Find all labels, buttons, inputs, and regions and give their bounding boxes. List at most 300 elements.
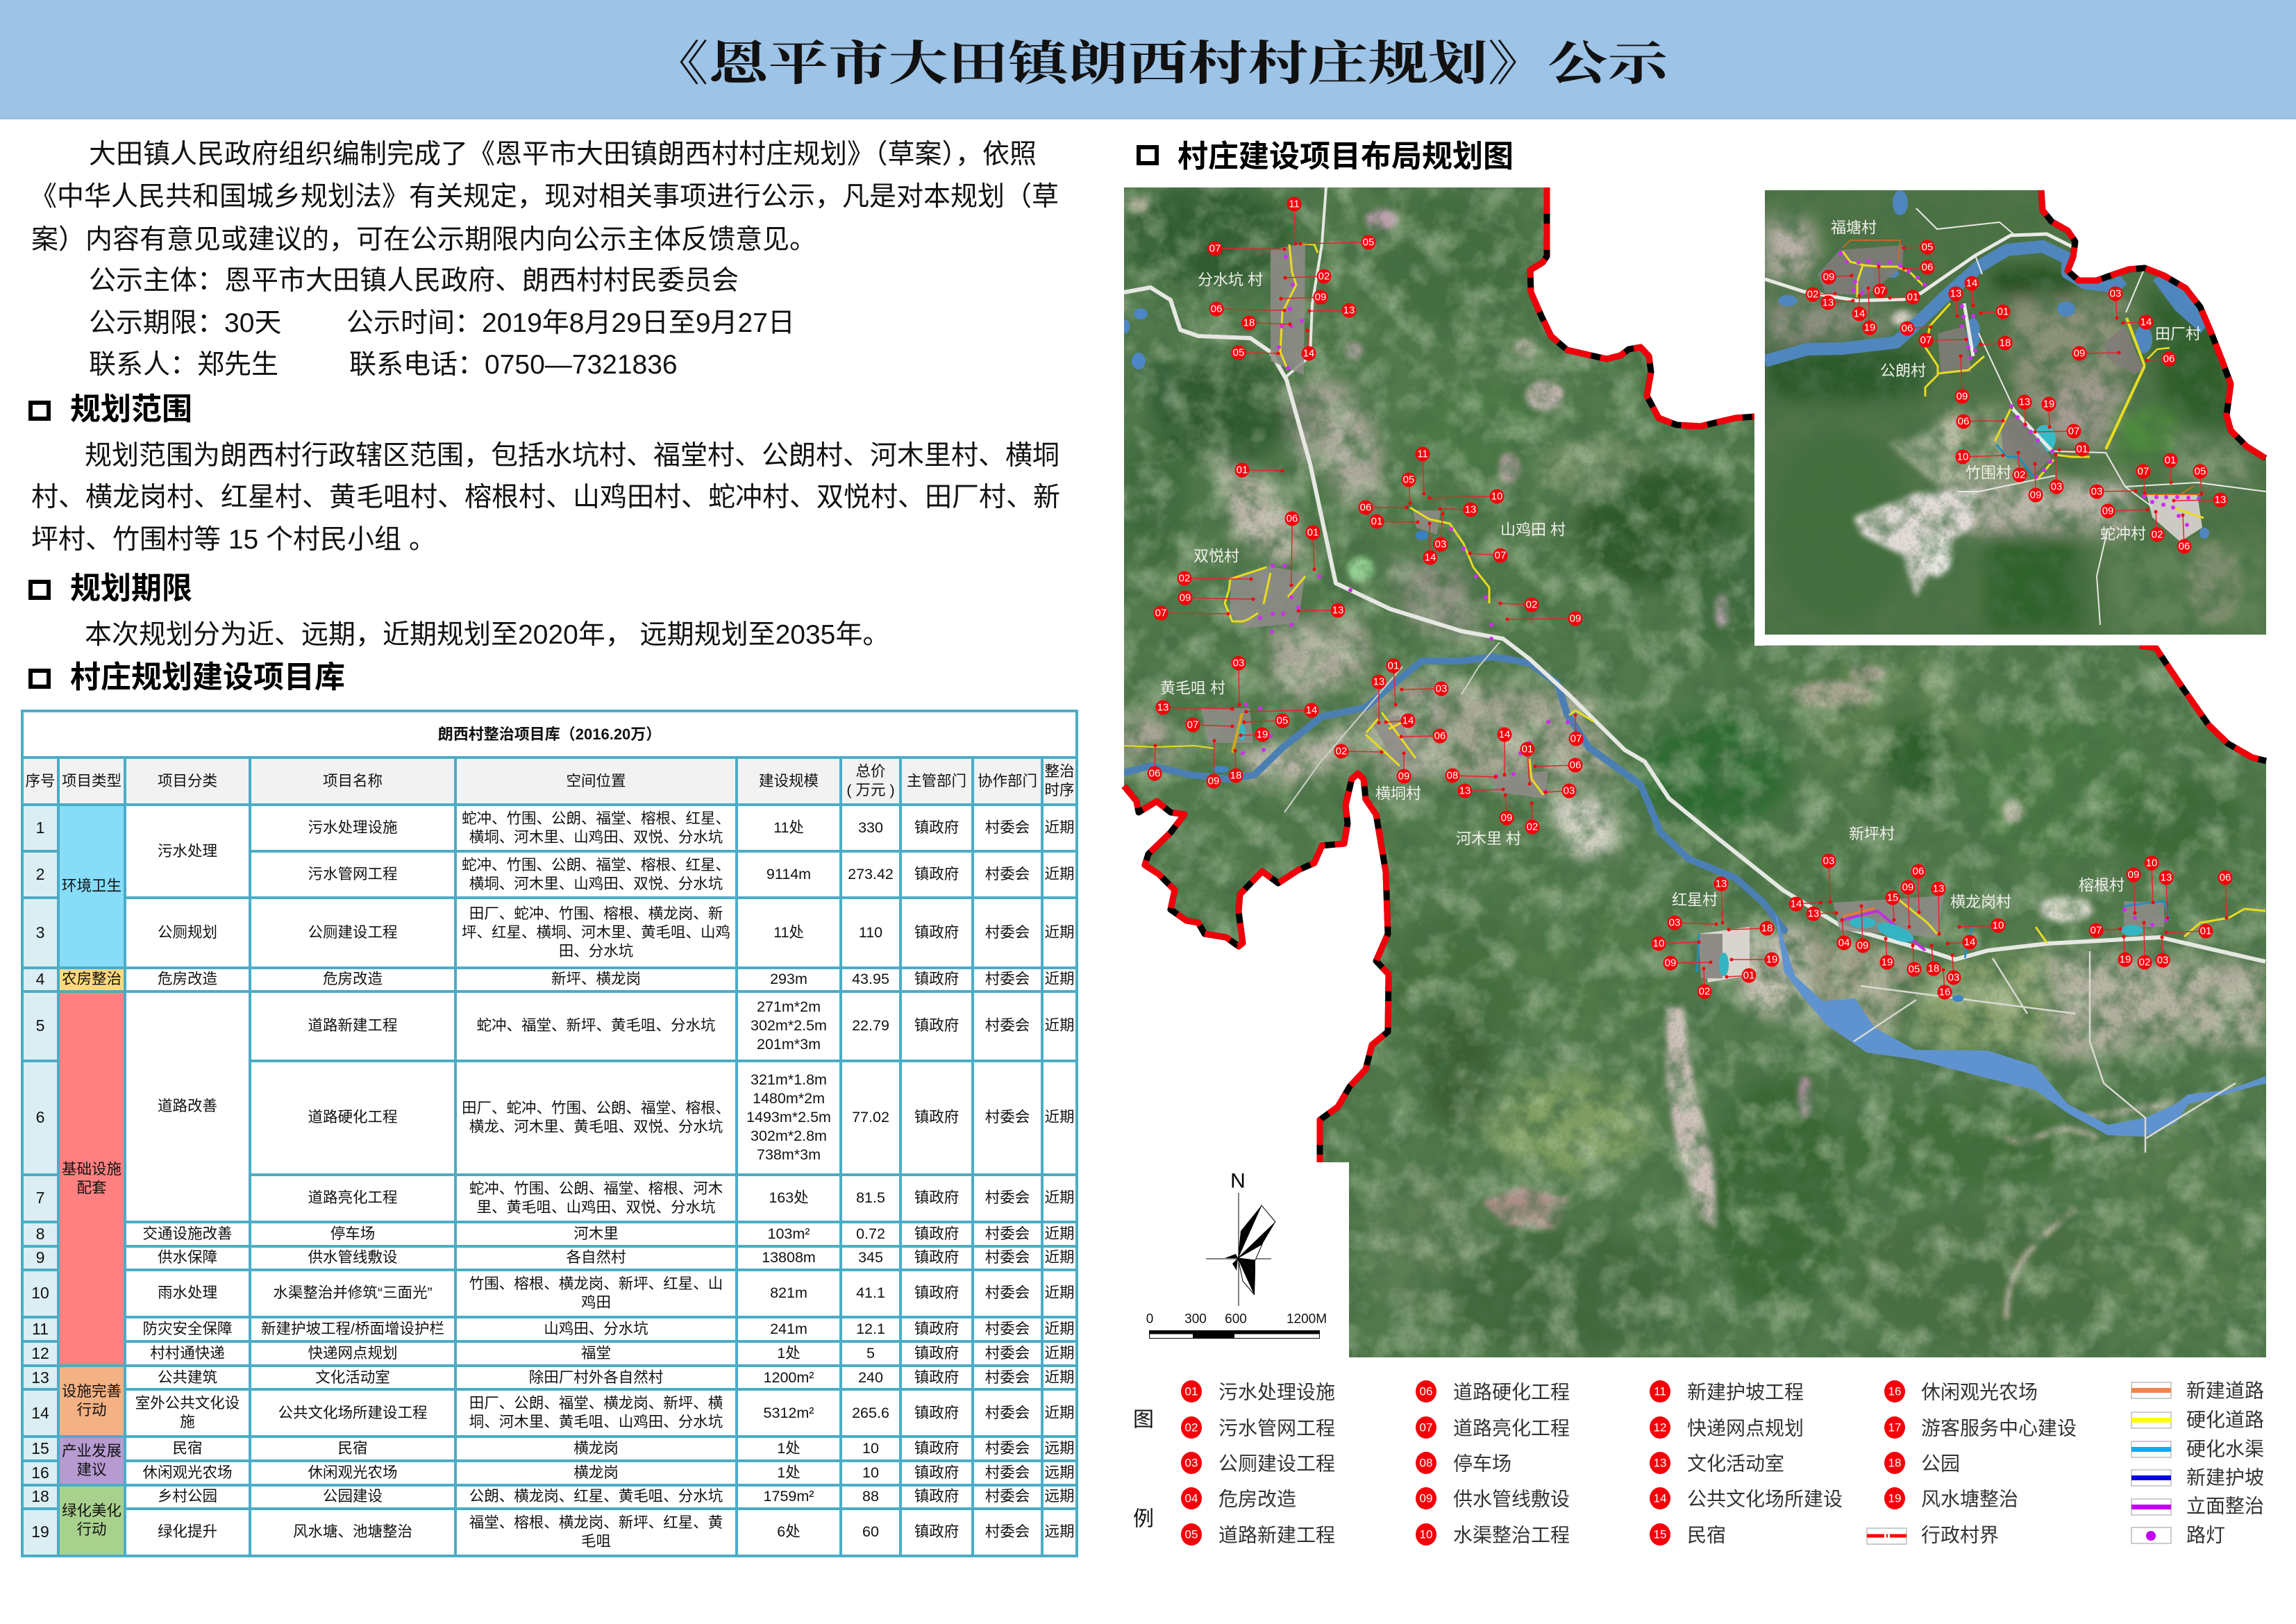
project markers: main map: 06 (2220, 872, 2231, 883)
row 14 (22, 1389, 1077, 1437)
row 6: 村委会 (985, 1109, 1030, 1125)
scope text block: 规划范围为朗西村行政辖区范围，包括水坑村、福堂村、公朗村、河木里村、横垌 (85, 441, 1059, 471)
legend: numbered project items: 01 (1185, 1384, 1198, 1398)
row 6: 1493m*2.5m (746, 1109, 831, 1125)
legend: line symbols: 行政村界 (1921, 1525, 1999, 1546)
row 12: 福堂 (581, 1345, 611, 1362)
compass: N (1230, 1169, 1246, 1193)
row 10: 村委会 (985, 1284, 1030, 1301)
table title row: 行动 (76, 1402, 107, 1418)
project markers: inset: 18 (2000, 337, 2011, 349)
project markers: inset: 06 (2163, 353, 2175, 365)
row 7: 里、黄毛咀、山鸡田、双悦、分水坑 (476, 1199, 715, 1216)
row 19: 19 (31, 1523, 49, 1541)
row 10 (22, 1269, 1077, 1317)
row 11 (22, 1317, 1077, 1341)
row 9: 各自然村 (566, 1249, 626, 1266)
project markers: main map: 09 (1665, 957, 1676, 969)
row 9: 镇政府 (914, 1249, 959, 1266)
village labels: main map: 河木里 村 (1456, 830, 1521, 847)
villages and project routes: main (1124, 243, 2265, 1002)
project markers: main map: 13 (1343, 304, 1355, 317)
row 3: 镇政府 (914, 924, 959, 941)
row 5: 201m*3m (757, 1036, 821, 1053)
project markers: main map: 03 (1669, 916, 1680, 929)
row 18: 公朗、横龙岗、红星、黄毛咀、分水坑 (469, 1488, 723, 1505)
project markers: main map: 06 (1149, 768, 1160, 779)
row 9: 345 (858, 1249, 883, 1266)
project markers: main map: 02 (1179, 572, 1190, 585)
row 8: 103m² (768, 1225, 810, 1241)
table title row (22, 711, 1077, 1555)
row 7: 81.5 (856, 1189, 885, 1206)
legend: numbered project items: 供水管线敷设 (1453, 1489, 1570, 1509)
legend: numbered project items: 休闲观光农场 (1921, 1382, 2038, 1403)
row 10: 鸡田 (581, 1294, 611, 1311)
row 14: 施 (180, 1414, 195, 1430)
row 13: 文化活动室 (315, 1369, 390, 1386)
row 3: 3 (36, 923, 44, 941)
row 10: 821m (770, 1284, 807, 1301)
project markers: main map: 18 (1230, 769, 1241, 782)
legend: numbered project items: 17 (1888, 1421, 1901, 1434)
project markers: inset: 09 (1956, 390, 1968, 403)
row 13 (22, 1366, 1077, 1389)
table header row: 协作部门 (978, 772, 1037, 789)
row 3: 公厕规划 (158, 924, 217, 941)
intro text block: 公示期限：30天 (89, 308, 281, 338)
row 5: 村委会 (985, 1017, 1030, 1034)
village labels: main map: 榕根村 (2079, 876, 2125, 894)
row 16: 10 (862, 1464, 879, 1480)
row 15: 1处 (777, 1440, 801, 1457)
legend: numbered project items (1181, 1380, 2077, 1546)
row 19: 镇政府 (914, 1523, 959, 1540)
project markers: inset: 02 (2014, 469, 2025, 480)
legend title: 例 (1133, 1508, 1154, 1530)
map panel (1122, 187, 2268, 1544)
row 6: 田厂、蛇冲、竹围、公朗、福堂、榕根、 (462, 1100, 730, 1116)
project markers: main map: 09 (1501, 812, 1512, 823)
row 16: 村委会 (985, 1464, 1030, 1480)
inset villages, roads and routes (1765, 208, 2266, 625)
project markers: main map: 10 (1491, 490, 1502, 503)
row 9 (22, 1246, 1077, 1269)
table header row (22, 757, 1077, 805)
project markers: main map: 05 (1277, 715, 1288, 726)
row 4: 农房整治 (62, 971, 121, 987)
project markers: main map: 07 (1187, 719, 1198, 730)
roads: main (1124, 187, 2265, 1153)
row 13: 镇政府 (914, 1369, 959, 1386)
project markers: main map: 02 (1527, 821, 1538, 833)
project markers: main map: 02 (1318, 271, 1330, 282)
row 5: 蛇冲、福堂、新坪、黄毛咀、分水坑 (476, 1017, 715, 1034)
row 15: 远期 (1045, 1440, 1075, 1457)
row 8: 交通设施改善 (142, 1225, 232, 1241)
project markers: main map: 07 (1570, 733, 1582, 744)
row 19: 毛咀 (581, 1533, 611, 1550)
project markers: main map: 18 (1243, 317, 1255, 329)
scale bar: 1200M (1287, 1312, 1327, 1326)
row 8: 近期 (1045, 1225, 1075, 1241)
row 14: 14 (31, 1404, 49, 1422)
row 13: 13 (31, 1368, 49, 1386)
scale bar: 300 (1184, 1312, 1207, 1326)
project markers: main map: 05 (1403, 474, 1414, 486)
row 12: 镇政府 (914, 1345, 959, 1362)
row 12: 村村通快递 (150, 1345, 225, 1362)
row 1: 横垌、河木里、山鸡田、双悦、分水坑 (469, 829, 723, 846)
row 15: 横龙岗 (573, 1440, 619, 1457)
project markers: main map: 01 (1307, 526, 1318, 539)
legend: numbered project items: 风水塘整治 (1921, 1489, 2018, 1509)
project markers: main map: 13 (1933, 883, 1944, 894)
row 16: 休闲观光农场 (142, 1464, 232, 1480)
row 18: 公园建设 (323, 1488, 383, 1505)
project markers: inset: 14 (1854, 308, 1865, 319)
intro text block: 联系电话：0750—7321836 (349, 350, 678, 380)
village boundary: main (1124, 187, 2266, 1162)
legend: numbered project items: 停车场 (1453, 1453, 1511, 1475)
legend: numbered project items: 道路新建工程 (1218, 1525, 1335, 1546)
project markers: main map: 18 (1928, 962, 1939, 975)
row 12: 12 (31, 1344, 49, 1362)
project markers: main map: 05 (1363, 236, 1374, 249)
texture (1124, 187, 2266, 1357)
legend: numbered project items: 06 (1420, 1384, 1432, 1398)
row 4 (22, 968, 1077, 991)
row 11: 山鸡田、分水坑 (544, 1321, 648, 1337)
row 16: 休闲观光农场 (308, 1464, 397, 1480)
table title row: 朗西村整治项目库（2016.20万） (438, 726, 661, 743)
legend: numbered project items: 14 (1654, 1491, 1666, 1505)
project markers: main map: 05 (1909, 964, 1920, 975)
project markers: main map: 05 (1233, 347, 1244, 358)
row 18: 乡村公园 (158, 1488, 217, 1505)
village labels: inset: 竹围村 (1966, 464, 2011, 482)
row 6: 镇政府 (914, 1109, 959, 1125)
project markers: main map: 13 (1465, 504, 1476, 515)
table header row: ( 万元 ) (846, 782, 895, 798)
row 2: 2 (36, 865, 44, 883)
row 8: 停车场 (330, 1225, 375, 1241)
village labels: main map: 分水坑 村 (1198, 271, 1263, 289)
legend: line symbols: 硬化道路 (2186, 1409, 2264, 1430)
project markers: main map: 09 (1208, 775, 1219, 787)
project markers: main map: 13 (1808, 908, 1819, 919)
table title row: 绿化美化 (62, 1502, 121, 1519)
legend: numbered project items: 文化活动室 (1687, 1453, 1784, 1475)
table title row: 基础设施 (62, 1161, 121, 1178)
row 7: 蛇冲、竹围、公朗、福堂、榕根、河木 (469, 1180, 723, 1197)
project markers: main map: 14 (1303, 347, 1314, 360)
project markers: inset: 19 (2043, 399, 2054, 410)
row 8 (22, 1222, 1077, 1246)
row 6: 77.02 (852, 1109, 889, 1125)
row 18: 88 (862, 1488, 879, 1505)
project markers: inset: 02 (2152, 529, 2163, 540)
row 7: 镇政府 (914, 1189, 959, 1206)
intro text block: 联系人：郑先生 (89, 350, 278, 380)
legend title: 图 (1133, 1408, 1154, 1432)
village labels: inset (1831, 219, 2201, 543)
row 5: 近期 (1045, 1017, 1075, 1034)
village labels: inset: 福塘村 (1831, 219, 1877, 236)
project markers: main map: 09 (1180, 592, 1191, 604)
row 11: 近期 (1045, 1321, 1075, 1337)
project markers: main map: 02 (1699, 986, 1710, 997)
scope text block (31, 441, 1060, 555)
intro text block (30, 140, 1059, 380)
title banner (0, 0, 2296, 119)
row 1: 污水处理设施 (308, 819, 397, 836)
legend: numbered project items: 13 (1654, 1457, 1666, 1469)
table header row: 序号 (25, 772, 56, 789)
row 9: 供水保障 (158, 1249, 217, 1266)
project markers: main map: 14 (1402, 715, 1414, 726)
intro text block: 案）内容有意见或建议的，可在公示期限内向公示主体反馈意见。 (31, 225, 816, 255)
row 14: 村委会 (985, 1404, 1030, 1421)
row 19: 绿化提升 (158, 1523, 217, 1540)
row 2: 273.42 (848, 866, 894, 882)
legend: numbered project items: 快递网点规划 (1687, 1418, 1804, 1439)
heading: planning period: 规划期限 (70, 571, 192, 605)
row 6: 321m*1.8m (751, 1071, 827, 1088)
row 7: 道路亮化工程 (308, 1189, 397, 1206)
row 8: 河木里 (573, 1225, 619, 1241)
row 18: 18 (31, 1487, 49, 1505)
legend: numbered project items: 公厕建设工程 (1218, 1453, 1335, 1475)
legend: numbered project items: 16 (1888, 1384, 1901, 1398)
row 5: 271m*2m (757, 998, 821, 1015)
project markers: inset: 06 (1958, 415, 1969, 428)
inset map (1765, 190, 2266, 635)
row 15: 15 (31, 1439, 49, 1457)
project markers: inset: 09 (2074, 347, 2085, 360)
table title row: 建议 (76, 1462, 107, 1478)
project markers: main map: 18 (1761, 922, 1773, 935)
project markers: main map: 02 (1336, 746, 1347, 757)
project markers: inset: 13 (1822, 297, 1834, 308)
village labels: main map: 横垌村 (1375, 785, 1421, 803)
row 5 (22, 991, 1077, 1061)
row 3: 11处 (773, 924, 804, 941)
project markers: inset: 01 (2077, 443, 2088, 455)
project markers: main map: 06 (1570, 760, 1581, 771)
project markers: inset: 05 (1922, 242, 1933, 253)
scale bar: 0 (1146, 1312, 1153, 1326)
heading: project library: 村庄规划建设项目库 (70, 660, 345, 694)
project markers: main map: 09 (1857, 940, 1868, 951)
row 2: 镇政府 (914, 866, 959, 882)
scale bar: 600 (1225, 1312, 1247, 1326)
row 9: 近期 (1045, 1249, 1075, 1266)
row 15: 村委会 (985, 1440, 1030, 1457)
scope text block: 村、横龙岗村、红星村、黄毛咀村、榕根村、山鸡田村、蛇冲村、双悦村、田厂村、新 (31, 483, 1060, 512)
row 12 (22, 1341, 1077, 1366)
row 4: 293m (770, 971, 807, 987)
project markers: inset: 13 (1950, 287, 1961, 300)
legend: numbered project items: 02 (1185, 1421, 1198, 1434)
heading: planning scope: 规划范围 (70, 392, 192, 426)
row 19: 风水塘、池塘整治 (293, 1523, 412, 1540)
project markers: inset: 05 (2195, 465, 2206, 478)
row 19: 6处 (777, 1523, 801, 1540)
project markers: main map: 19 (2120, 954, 2131, 965)
inset white outside boundary (2041, 187, 2268, 458)
row 16: 镇政府 (914, 1464, 959, 1480)
row 10: 镇政府 (914, 1284, 959, 1301)
legend: numbered project items: 11 (1654, 1384, 1666, 1398)
project markers: inset: 02 (1807, 289, 1818, 300)
project markers: main map: 10 (1993, 919, 2004, 932)
legend title (1133, 1408, 1154, 1530)
project markers: inset: 07 (2138, 465, 2149, 478)
satellite terrain: main map (1118, 184, 2266, 1357)
row 2: 横垌、河木里、山鸡田、双悦、分水坑 (469, 875, 723, 891)
row 3: 村委会 (985, 924, 1030, 941)
row 16 (22, 1461, 1077, 1484)
legend: numbered project items: 08 (1420, 1457, 1432, 1469)
row 12: 5 (866, 1345, 875, 1362)
scale bar (1146, 1312, 1327, 1339)
table title row: 环境卫生 (62, 878, 121, 894)
project markers: inset: 07 (1920, 335, 1932, 346)
row 4: 新坪、横龙岗 (551, 971, 641, 987)
table header row: 总价 (855, 763, 886, 780)
intro text block: 《中华人民共和国城乡规划法》有关规定，现对相关事项进行公示，凡是对本规划（草 (30, 182, 1059, 212)
project markers: inset: 03 (2110, 287, 2121, 300)
row 18: 村委会 (985, 1488, 1030, 1505)
project markers: inset: 14 (2140, 317, 2152, 328)
project markers: main map: 10 (1653, 937, 1664, 950)
row 12: 近期 (1045, 1345, 1075, 1362)
row 8: 0.72 (856, 1225, 885, 1241)
row 15: 产业发展 (62, 1443, 121, 1459)
row 1: 镇政府 (914, 819, 959, 836)
row 2: 9114m (766, 866, 811, 882)
legend: numbered project items: 公共文化场所建设 (1687, 1489, 1843, 1509)
row 11: 241m (770, 1321, 807, 1337)
legend: numbered project items: 道路硬化工程 (1453, 1382, 1570, 1403)
project markers: main map: 13 (1157, 701, 1168, 714)
row 14: 公共文化场所建设工程 (278, 1404, 428, 1421)
row 14: 近期 (1045, 1404, 1075, 1421)
row 10: 雨水处理 (158, 1284, 217, 1301)
row 14: 镇政府 (914, 1404, 959, 1421)
row 10: 竹围、榕根、横龙岗、新坪、红星、山 (469, 1275, 723, 1292)
project markers: main map: 09 (2128, 869, 2139, 880)
inset white frame (1754, 181, 2268, 646)
project markers: inset: 06 (1922, 261, 1933, 274)
legend: numbered project items: 18 (1888, 1457, 1901, 1469)
row 18 (22, 1484, 1077, 1508)
row 9: 供水管线敷设 (308, 1249, 397, 1266)
row 1: 污水处理 (158, 843, 217, 860)
row 14: 垌、河木里、黄毛咀、山鸡田、分水坑 (469, 1414, 723, 1430)
row 13: 近期 (1045, 1369, 1075, 1386)
project markers: inset (1805, 240, 2227, 554)
project markers: main map: 08 (1447, 769, 1458, 782)
row 12: 1处 (777, 1345, 801, 1362)
row 15: 民宿 (172, 1440, 203, 1457)
project markers: main map: 06 (1287, 512, 1298, 525)
project markers: main map: 19 (1766, 954, 1777, 965)
project markers: main map: 13 (1373, 676, 1384, 687)
project markers: inset: 07 (2068, 425, 2079, 437)
project markers: main map: 13 (1716, 878, 1727, 890)
row 5: 镇政府 (914, 1017, 959, 1034)
project markers: inset: 06 (2179, 540, 2190, 553)
project markers: main map: 01 (1388, 660, 1399, 672)
table header row: 主管部门 (907, 772, 966, 789)
row 15: 10 (862, 1440, 879, 1457)
project markers: main map: 06 (1211, 303, 1222, 315)
row 5: 302m*2.5m (751, 1017, 827, 1034)
row 6: 1480m*2m (753, 1090, 825, 1107)
legend: numbered project items: 10 (1420, 1527, 1432, 1541)
project markers: main map: 01 (1743, 969, 1754, 982)
legend: numbered project items: 民宿 (1687, 1525, 1726, 1546)
row 6: 6 (36, 1108, 44, 1126)
project markers: main map: 13 (1332, 604, 1343, 617)
project markers: main map: 14 (1791, 898, 1802, 910)
project markers: inset: 07 (1875, 285, 1886, 297)
row 11: 镇政府 (914, 1321, 959, 1337)
row 19: 村委会 (985, 1523, 1030, 1540)
row 2: 近期 (1045, 866, 1075, 882)
project markers: inset: 10 (1957, 451, 1968, 462)
project markers: main map: 19 (1882, 957, 1893, 968)
project markers: main map: 03 (1823, 855, 1834, 867)
village labels: main map: 黄毛咀 村 (1160, 679, 1225, 697)
row 11: 新建护坡工程/桥面增设护栏 (261, 1321, 444, 1337)
project markers: main map: 14 (1306, 704, 1317, 717)
table header row: 空间位置 (566, 772, 626, 789)
legend: numbered project items: 09 (1420, 1491, 1432, 1505)
village labels: main map: 双悦村 (1193, 547, 1239, 565)
row 8: 村委会 (985, 1225, 1030, 1241)
row 14: 5312m² (764, 1404, 814, 1421)
legend: line symbols: 新建护坡 (2186, 1466, 2264, 1489)
period text block: 本次规划分为近、远期，近期规划至2020年， 远期规划至2035年。 (85, 620, 889, 650)
intro text block: 大田镇人民政府组织编制完成了《恩平市大田镇朗西村村庄规划》（草案），依照 (89, 140, 1037, 169)
table title row: 道路改善 (158, 1098, 217, 1114)
legend: numbered project items: 游客服务中心建设 (1921, 1418, 2077, 1439)
row 8: 8 (36, 1225, 44, 1243)
row 15: 民宿 (337, 1440, 368, 1457)
row 7: 村委会 (985, 1189, 1030, 1206)
village labels: inset: 公朗村 (1880, 362, 1926, 379)
project markers: main map: 03 (1948, 972, 1959, 983)
row 19: 60 (862, 1523, 879, 1540)
row 9: 村委会 (985, 1249, 1030, 1266)
row 3: 公厕建设工程 (308, 924, 397, 941)
project markers: main map (1147, 197, 2233, 1000)
row 7: 近期 (1045, 1189, 1075, 1206)
legend: numbered project items: 公园 (1921, 1453, 1960, 1475)
row 3: 坪、红星、横垌、河木里、黄毛咀、山鸡 (462, 924, 730, 941)
project markers: main map: 14 (1425, 551, 1436, 564)
inset river and ponds (1765, 190, 2209, 539)
row 18: 远期 (1045, 1488, 1075, 1505)
row 19: 福堂、榕根、横龙岗、新坪、红星、黄 (469, 1514, 723, 1530)
row 13: 1200m² (764, 1369, 814, 1386)
row 8: 镇政府 (914, 1225, 959, 1241)
project markers: main map: 16 (1939, 986, 1950, 998)
row 7: 163处 (769, 1189, 809, 1206)
